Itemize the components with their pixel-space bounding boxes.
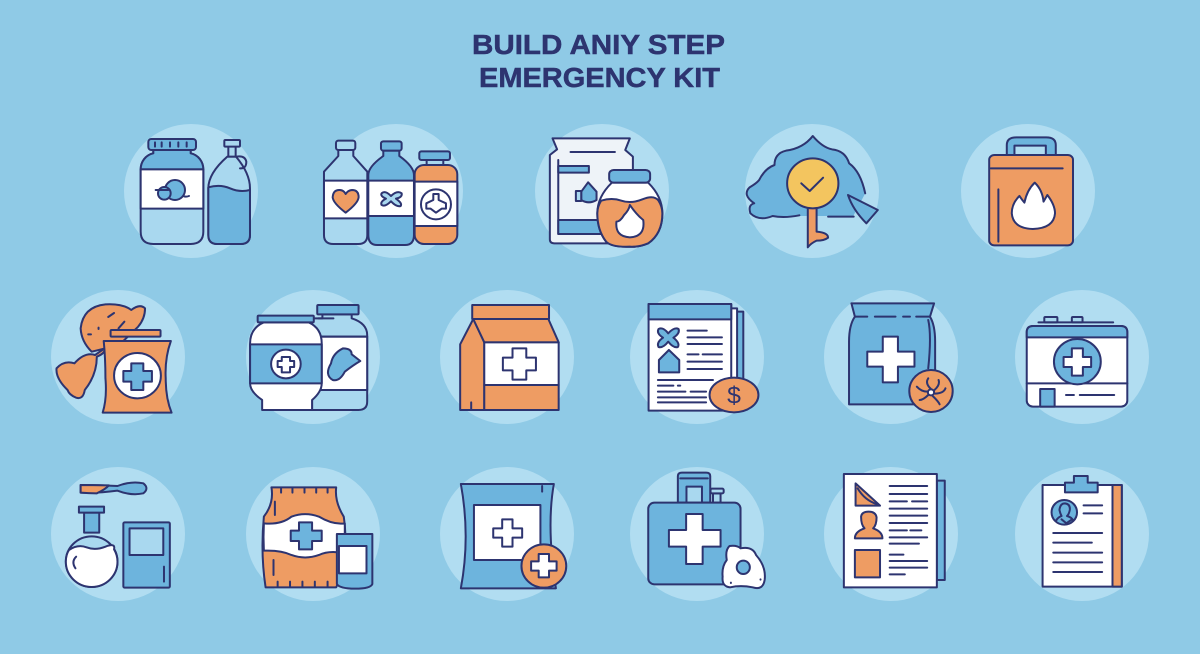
icon: swab, flask and card <box>66 482 170 588</box>
icon: blue bag with cross and fan <box>849 303 953 412</box>
icon: profile document <box>844 474 945 587</box>
title: EMERGENCY KIT <box>479 62 720 93</box>
icon: clipboard <box>1043 476 1122 587</box>
icon: first aid kit with cross badge <box>1027 317 1127 407</box>
icon: tree with check badge and leaf <box>747 136 878 247</box>
icon: jar and water bottle <box>141 139 250 244</box>
background circles <box>51 124 1149 601</box>
title: BUILD ANIY STEP <box>472 29 725 60</box>
icon: white and blue pill jars <box>250 305 367 410</box>
icon: document with dollar coin: $ <box>727 383 741 410</box>
icon: orange fire case <box>989 137 1073 245</box>
icon: medical suitcase with egg <box>648 473 765 588</box>
icon: three medicine bottles <box>324 141 457 245</box>
icon: document with dollar coin <box>649 304 758 412</box>
icon: food bag and cup <box>262 487 372 589</box>
icon: milk carton with cross <box>460 305 559 410</box>
icon: food pieces and cross sack <box>56 304 172 413</box>
icon: blue pouch with plus badge <box>461 484 566 588</box>
title <box>472 29 725 93</box>
icon: document bag and flame jar <box>550 138 662 247</box>
